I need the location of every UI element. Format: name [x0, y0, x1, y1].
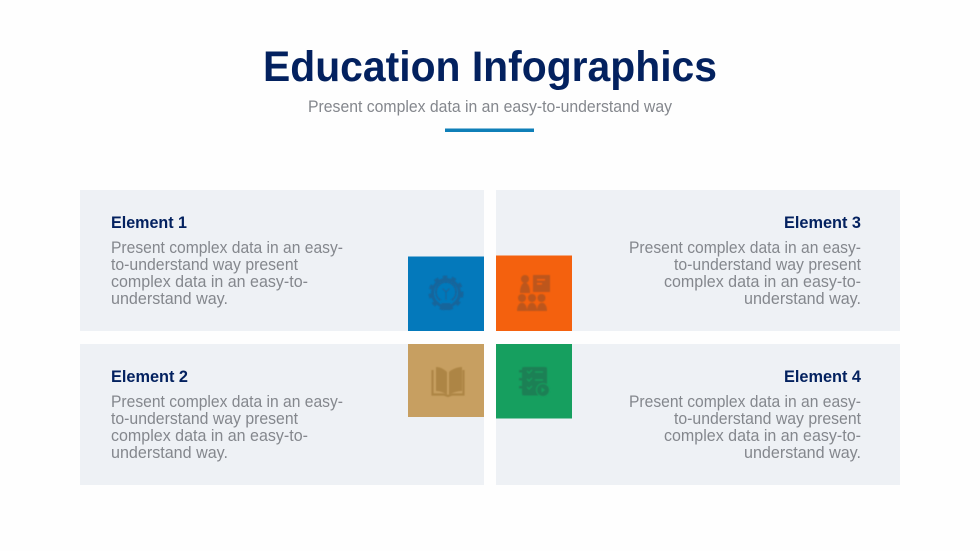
- heading: element 4: Element 4: [784, 367, 862, 386]
- text block: element 2: Present complex data in an easy-: [111, 393, 343, 411]
- heading: element 3: Element 3: [784, 213, 861, 232]
- text block: element 4: complex data in an easy-to-: [664, 427, 861, 445]
- text block: element 1: [111, 239, 343, 308]
- panel: element 1: [80, 190, 484, 331]
- text block: element 4: Present complex data in an easy-: [629, 393, 861, 411]
- icon tile: lightbulb gear: [408, 256, 484, 331]
- text block: element 1: Present complex data in an easy-: [111, 239, 343, 257]
- text block: element 3: to-understand way present: [674, 256, 861, 274]
- heading: element 2: Element 2: [111, 367, 188, 386]
- subtitle: Present complex data in an easy-to-understand way: [308, 98, 673, 116]
- panel: element 3: [496, 190, 900, 331]
- text block: element 2: understand way.: [111, 444, 228, 462]
- text block: element 1: to-understand way present: [111, 256, 298, 274]
- text block: element 2: to-understand way present: [111, 410, 298, 428]
- text block: element 1: understand way.: [111, 290, 228, 308]
- text block: element 4: understand way.: [744, 444, 861, 462]
- text block: element 3: Present complex data in an easy-: [629, 239, 861, 257]
- icon tile: open book: [408, 344, 484, 417]
- text block: element 1: complex data in an easy-to-: [111, 273, 308, 291]
- text block: element 2: complex data in an easy-to-: [111, 427, 308, 445]
- icon tile: teacher and students: [496, 256, 572, 331]
- heading: element 1: Element 1: [111, 213, 187, 232]
- text block: element 4: [629, 393, 861, 462]
- text block: element 4: to-understand way present: [674, 410, 861, 428]
- text block: element 3: complex data in an easy-to-: [664, 273, 861, 291]
- panel: element 4: [496, 344, 900, 485]
- title underline: [445, 128, 534, 132]
- text block: element 2: [111, 393, 343, 462]
- icon tile: checklist notebook: [496, 344, 572, 418]
- title: Education Infographics: [263, 43, 717, 91]
- text block: element 3: [629, 239, 861, 308]
- panel: element 2: [80, 344, 484, 485]
- text block: element 3: understand way.: [744, 290, 861, 308]
